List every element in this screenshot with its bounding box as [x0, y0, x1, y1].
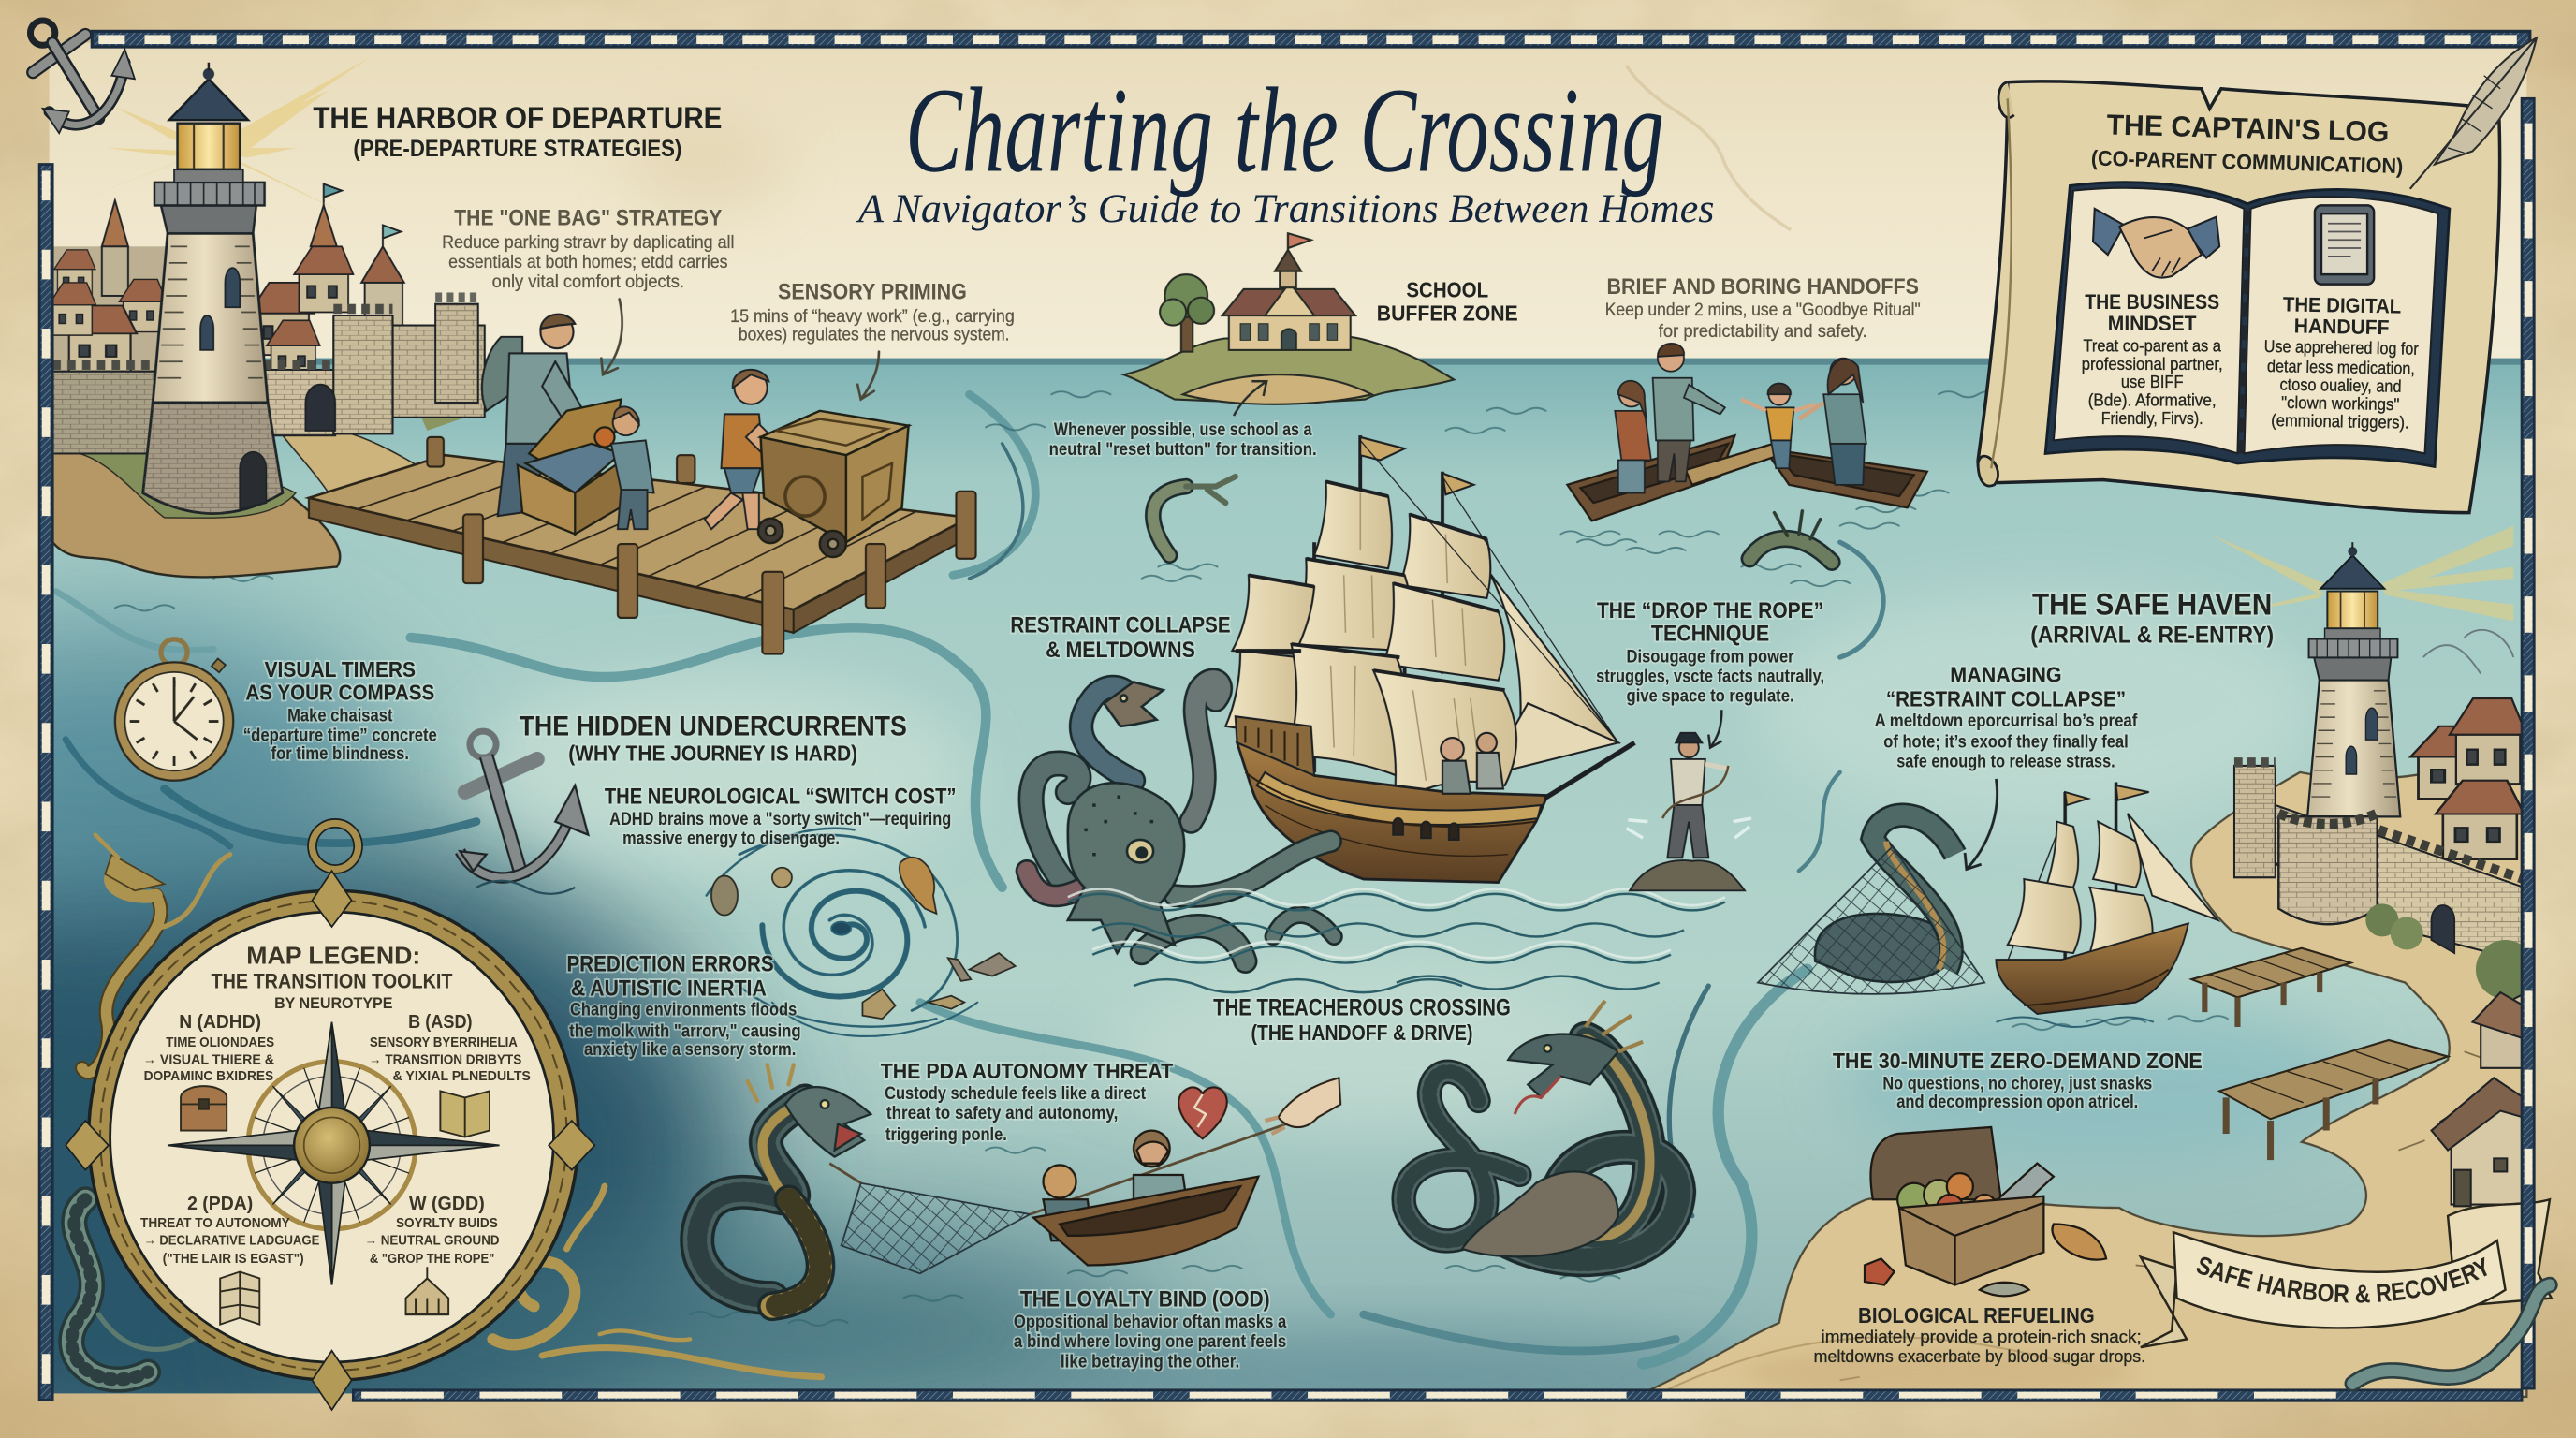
- parent with backpack: [482, 315, 594, 516]
- text: brief and boring handoffs: Keep under 2 mins, use a "Goodbye Ritual": [1605, 301, 1921, 320]
- kraken body and head: [1068, 682, 1184, 953]
- text: brief and boring handoffs: [1605, 275, 1921, 342]
- land: sandy shore and bay, lower right: [1634, 740, 2526, 1397]
- text: treacherous crossing heading: [1213, 996, 1511, 1045]
- shore village: [2432, 992, 2524, 1206]
- ornate cargo box on wheels: [758, 411, 909, 557]
- text: business mindset: [2082, 290, 2223, 428]
- safe haven bastion: [2278, 814, 2535, 999]
- harbor docks: [2191, 948, 2448, 1160]
- arrows to one bag and sensory priming: [601, 299, 879, 400]
- sea serpent humps top middle: [1153, 477, 1832, 562]
- text: digital handoff: detar less medication,: [2267, 356, 2415, 378]
- text: biological refueling: meltdowns exacerbate by blood sugar drops.: [1814, 1346, 2145, 1366]
- text: pda autonomy threat: [881, 1059, 1173, 1145]
- text: pda autonomy threat: triggering ponle.: [886, 1125, 1007, 1145]
- text: prediction errors: PREDICTION ERRORS: [567, 952, 774, 976]
- text: visual timers: AS YOUR COMPASS: [245, 681, 434, 705]
- fishing net and rope: [829, 1114, 1314, 1273]
- text: safe haven heading: [2030, 587, 2274, 648]
- text: brief and boring handoffs: BRIEF AND BORING HANDOFFS: [1606, 275, 1919, 300]
- text: map legend heading: BY NEUROTYPE: [274, 994, 392, 1012]
- text: hidden undercurrents heading: [520, 711, 907, 766]
- text: loyalty bind: like betraying the other.: [1061, 1352, 1239, 1372]
- icon: quill feather: [2410, 37, 2537, 189]
- arrow to rope man: [1708, 710, 1721, 748]
- text: neurological switch cost: [605, 785, 956, 848]
- text: managing restraint collapse: “RESTRAINT COLLAPSE”: [1886, 687, 2126, 712]
- text: one bag strategy: THE "ONE BAG" STRATEGY: [454, 206, 723, 230]
- text: one bag strategy: only vital comfort objects.: [492, 272, 684, 292]
- legend: N ADHD: → VISUAL THIERE &: [143, 1051, 274, 1067]
- open trunk of comfort objects: [518, 400, 622, 534]
- text: restraint collapse and meltdowns: [1010, 614, 1231, 663]
- text: managing restraint collapse: MANAGING: [1950, 662, 2062, 686]
- safe haven lighthouse rays: [2210, 526, 2513, 621]
- legend: 2 PDA: [140, 1194, 319, 1267]
- text: harbor of departure heading: [313, 101, 722, 162]
- text: zero-demand zone: [1833, 1049, 2203, 1112]
- gold dragon ornament left of legend: [82, 835, 230, 1073]
- text: zero-demand zone: No questions, no chorey, just snasks: [1882, 1075, 2152, 1094]
- text: visual timers: “departure time” concrete: [243, 726, 437, 746]
- text: sensory priming: SENSORY PRIMING: [778, 280, 967, 304]
- text: business mindset: professional partner,: [2082, 354, 2223, 374]
- serpent rock and head: [1462, 1001, 1643, 1256]
- family at handoff: [1615, 344, 1866, 493]
- dragon head 1: [785, 1087, 871, 1157]
- text: prediction errors: the molk with "arrorv," causing: [569, 1021, 801, 1041]
- text: hidden undercurrents heading: (WHY THE JOURNEY IS HARD): [568, 741, 857, 766]
- text: visual timers: Make chaisast: [287, 707, 393, 726]
- legend: 2 PDA: THREAT TO AUTONOMY: [140, 1215, 290, 1231]
- text: treacherous crossing heading: THE TREACHEROUS CROSSING: [1213, 996, 1511, 1021]
- sunken anchor: [460, 731, 588, 894]
- text: biological refueling: immediately provide a protein-rich snack;: [1822, 1327, 2142, 1346]
- netted serpent: [1758, 815, 1984, 994]
- second sea serpent on rock: [1404, 1038, 1679, 1260]
- green serpent, bottom left corner: [71, 1199, 213, 1379]
- text: neurological switch cost: massive energy to disengage.: [622, 829, 840, 848]
- map legend compass: [66, 823, 594, 1410]
- text: drop the rope technique: give space to regulate.: [1627, 686, 1794, 706]
- text: managing restraint collapse: of hote; it’s exoof they finally feal: [1883, 733, 2129, 753]
- legend: W GDD: SOYRLTY BUIDS: [396, 1215, 498, 1231]
- text: sensory priming: [730, 280, 1015, 345]
- text: visual timers: for time blindness.: [271, 744, 409, 764]
- text: loyalty bind: Oppositional behavior oftan masks a: [1014, 1313, 1287, 1332]
- dock, left: [309, 437, 976, 654]
- text: neurological switch cost: THE NEUROLOGICAL “SWITCH COST”: [605, 785, 956, 809]
- safe haven lighthouse: [2307, 542, 2400, 816]
- map sky area: [50, 43, 2526, 372]
- text: sensory priming: 15 mins of “heavy work” (e.g., carrying: [730, 307, 1015, 327]
- text: prediction errors: [567, 952, 801, 1060]
- rowboat with children: [1033, 1131, 1258, 1265]
- text: digital handoff: HANDUFF: [2294, 314, 2390, 339]
- text: drop the rope technique: [1596, 599, 1824, 706]
- legend: N ADHD: N (ADHD): [179, 1012, 261, 1033]
- text: loyalty bind: a bind where loving one parent feels: [1014, 1332, 1286, 1352]
- title: Charting the Crossing: [905, 64, 1664, 198]
- text: captain's log heading: THE CAPTAIN'S LOG: [2106, 109, 2390, 148]
- text: school buffer zone: SCHOOL: [1406, 278, 1488, 302]
- text: school reset note: neutral "reset button" for transition.: [1049, 440, 1317, 460]
- text: drop the rope technique: THE “DROP THE ROPE”: [1597, 599, 1823, 624]
- broken heart: [1178, 1087, 1227, 1138]
- text: prediction errors: Changing environments floods: [570, 1001, 797, 1020]
- text: zero-demand zone: THE 30-MINUTE ZERO-DEMAND ZONE: [1833, 1049, 2203, 1073]
- school buffer island: [1123, 233, 1454, 404]
- legend: 2 PDA: 2 (PDA): [187, 1194, 253, 1214]
- text: biological refueling: [1814, 1303, 2145, 1366]
- text: neurological switch cost: ADHD brains move a "sorty switch"—requiring: [609, 810, 951, 829]
- text: harbor of departure heading: (PRE-DEPARTURE STRATEGIES): [353, 137, 681, 162]
- legend: 2 PDA: → DECLARATIVE LADGUAGE: [144, 1233, 319, 1249]
- text: prediction errors: & AUTISTIC INERTIA: [571, 977, 767, 1002]
- legend: N ADHD: DOPAMINC BXIDRES: [144, 1068, 273, 1084]
- text: business mindset: THE BUSINESS: [2085, 290, 2219, 314]
- text: digital handoff: (emmional triggers).: [2271, 410, 2409, 433]
- text: school buffer zone: [1377, 278, 1518, 325]
- text: business mindset: Treat co-parent as a: [2083, 336, 2222, 356]
- harbor of departure: rock base: [52, 379, 485, 577]
- legend: B ASD: SENSORY BYERRIHELIA: [370, 1034, 518, 1050]
- text: business mindset: (Bde). Aformative,: [2088, 390, 2217, 410]
- text: school buffer zone: BUFFER ZONE: [1377, 301, 1518, 325]
- churning waves at kraken and ship: [1068, 889, 1725, 992]
- text: safe haven heading: (ARRIVAL & RE-ENTRY): [2030, 623, 2274, 648]
- sea background: [0, 359, 2526, 1438]
- pocket watch visual timer: [115, 639, 233, 781]
- lighthouse rays left: [66, 57, 370, 213]
- text: digital handoff: THE DIGITAL: [2283, 292, 2401, 318]
- text: school reset note: [1049, 420, 1317, 460]
- text: zero-demand zone: and decompression opon atricel.: [1896, 1093, 2138, 1112]
- legend: W GDD: → NEUTRAL GROUND: [365, 1233, 500, 1249]
- legend: B ASD: B (ASD): [408, 1012, 473, 1033]
- arrival ship: [1996, 782, 2217, 1027]
- text: prediction errors: anxiety like a sensory storm.: [584, 1040, 796, 1060]
- text: business mindset: MINDSET: [2108, 312, 2197, 335]
- food treasure chest: [1865, 1127, 2106, 1296]
- text: biological refueling: BIOLOGICAL REFUELING: [1858, 1303, 2095, 1328]
- legend: 2 PDA: ("THE LAIR IS EGAST"): [163, 1251, 304, 1267]
- legend: B ASD: & YIXIAL PLNEDULTS: [392, 1068, 531, 1084]
- legend: N ADHD: [143, 1012, 274, 1084]
- text: restraint collapse and meltdowns: RESTRAINT COLLAPSE: [1010, 614, 1231, 638]
- safe harbor banner: [2102, 1162, 2554, 1348]
- castle town, left: [49, 184, 485, 453]
- legend: N ADHD: TIME OLIONDAES: [166, 1034, 274, 1050]
- text: map legend heading: [212, 941, 453, 1012]
- text: captain's log heading: (CO-PARENT COMMUNICATION): [2091, 145, 2404, 178]
- text: one bag strategy: [442, 206, 735, 292]
- water currents: [56, 394, 1883, 1364]
- legend: W GDD: & "GROP THE ROPE": [370, 1251, 494, 1267]
- safe harbor banner: SAFE HARBOR & RECOVERY: [2196, 1256, 2487, 1303]
- text: drop the rope technique: TECHNIQUE: [1651, 623, 1769, 647]
- text: digital handoff: "clown workings": [2281, 392, 2400, 414]
- text: school reset note: Whenever possible, use school as a: [1054, 420, 1312, 440]
- text: managing restraint collapse: safe enough to release strass.: [1896, 753, 2115, 772]
- legend: B ASD: → TRANSITION DRIBYTS: [369, 1051, 521, 1067]
- text: brief and boring handoffs: for predictability and safety.: [1659, 322, 1867, 342]
- safe haven castle and town: [2234, 630, 2526, 961]
- text: managing restraint collapse: [1875, 662, 2138, 772]
- arrow to school: [1234, 381, 1266, 416]
- text: drop the rope technique: struggles, vscte facts nautrally,: [1596, 667, 1824, 686]
- text: one bag strategy: essentials at both homes; etdd carries: [448, 253, 728, 272]
- legend: B ASD: [369, 1012, 531, 1084]
- first dragon with net: [697, 1064, 821, 1306]
- text: restraint collapse and meltdowns: & MELTDOWNS: [1046, 638, 1195, 663]
- whirlpool with debris: [707, 829, 1016, 1036]
- text: digital handoff: Use apprehered log for: [2264, 336, 2419, 359]
- child at trunk: [611, 406, 654, 529]
- text: digital handoff: [2262, 292, 2420, 433]
- handoff boats: [1567, 435, 1927, 521]
- icon: handshake: [2093, 209, 2219, 278]
- text: safe haven heading: THE SAFE HAVEN: [2032, 587, 2272, 621]
- text: pda autonomy threat: threat to safety and autonomy,: [886, 1104, 1118, 1123]
- text: hidden undercurrents heading: THE HIDDEN UNDERCURRENTS: [520, 711, 907, 741]
- text: visual timers: VISUAL TIMERS: [265, 657, 416, 682]
- main ship: [1225, 435, 1634, 883]
- text: captain's log heading: [2091, 108, 2405, 178]
- text: managing restraint collapse: A meltdown eporcurrisal bo’s preaf: [1875, 712, 2138, 731]
- text: business mindset: Friendly, Firvs).: [2101, 408, 2203, 428]
- text: visual timers: [243, 657, 437, 764]
- gold filigree bottom of legend: [493, 1186, 822, 1377]
- text: loyalty bind: THE LOYALTY BIND (OOD): [1020, 1287, 1270, 1312]
- text: pda autonomy threat: THE PDA AUTONOMY THREAT: [881, 1059, 1173, 1083]
- teal dragon tail, bottom right: [2352, 1285, 2550, 1384]
- top-left corner anchor: [30, 21, 135, 133]
- panel: captain's log scroll: [1978, 81, 2500, 513]
- text: pda autonomy threat: Custody schedule feels like a direct: [885, 1084, 1147, 1104]
- text: map legend heading: MAP LEGEND:: [246, 941, 420, 969]
- reaching hand: [1265, 1078, 1340, 1134]
- subtitle: A Navigator’s Guide to Transitions Between Homes: [856, 186, 1714, 231]
- text: harbor of departure heading: THE HARBOR OF DEPARTURE: [313, 101, 722, 135]
- text: loyalty bind: [1014, 1287, 1287, 1372]
- legend: W GDD: W (GDD): [409, 1194, 485, 1214]
- text: sensory priming: boxes) regulates the nervous system.: [739, 325, 1010, 345]
- text: treacherous crossing heading: (THE HANDOFF & DRIVE): [1251, 1020, 1472, 1045]
- kraken octopus: [1027, 681, 1334, 961]
- rope man on rock: [1627, 733, 1751, 890]
- text: business mindset: use BIFF: [2121, 372, 2184, 391]
- text: digital handoff: ctoso oualiey, and: [2279, 374, 2402, 396]
- icon: tablet: [2315, 205, 2374, 285]
- legend: W GDD: [365, 1194, 500, 1267]
- legend icons: [181, 1086, 490, 1325]
- lighthouse, left: [143, 63, 283, 513]
- arrow to netted serpent: [1965, 779, 1998, 869]
- text: drop the rope technique: Disougage from power: [1627, 647, 1794, 667]
- text: one bag strategy: Reduce parking stravr by daplicating all: [442, 233, 735, 253]
- text: map legend heading: THE TRANSITION TOOLKIT: [212, 970, 453, 993]
- boy pushing box (sensory priming): [705, 370, 779, 529]
